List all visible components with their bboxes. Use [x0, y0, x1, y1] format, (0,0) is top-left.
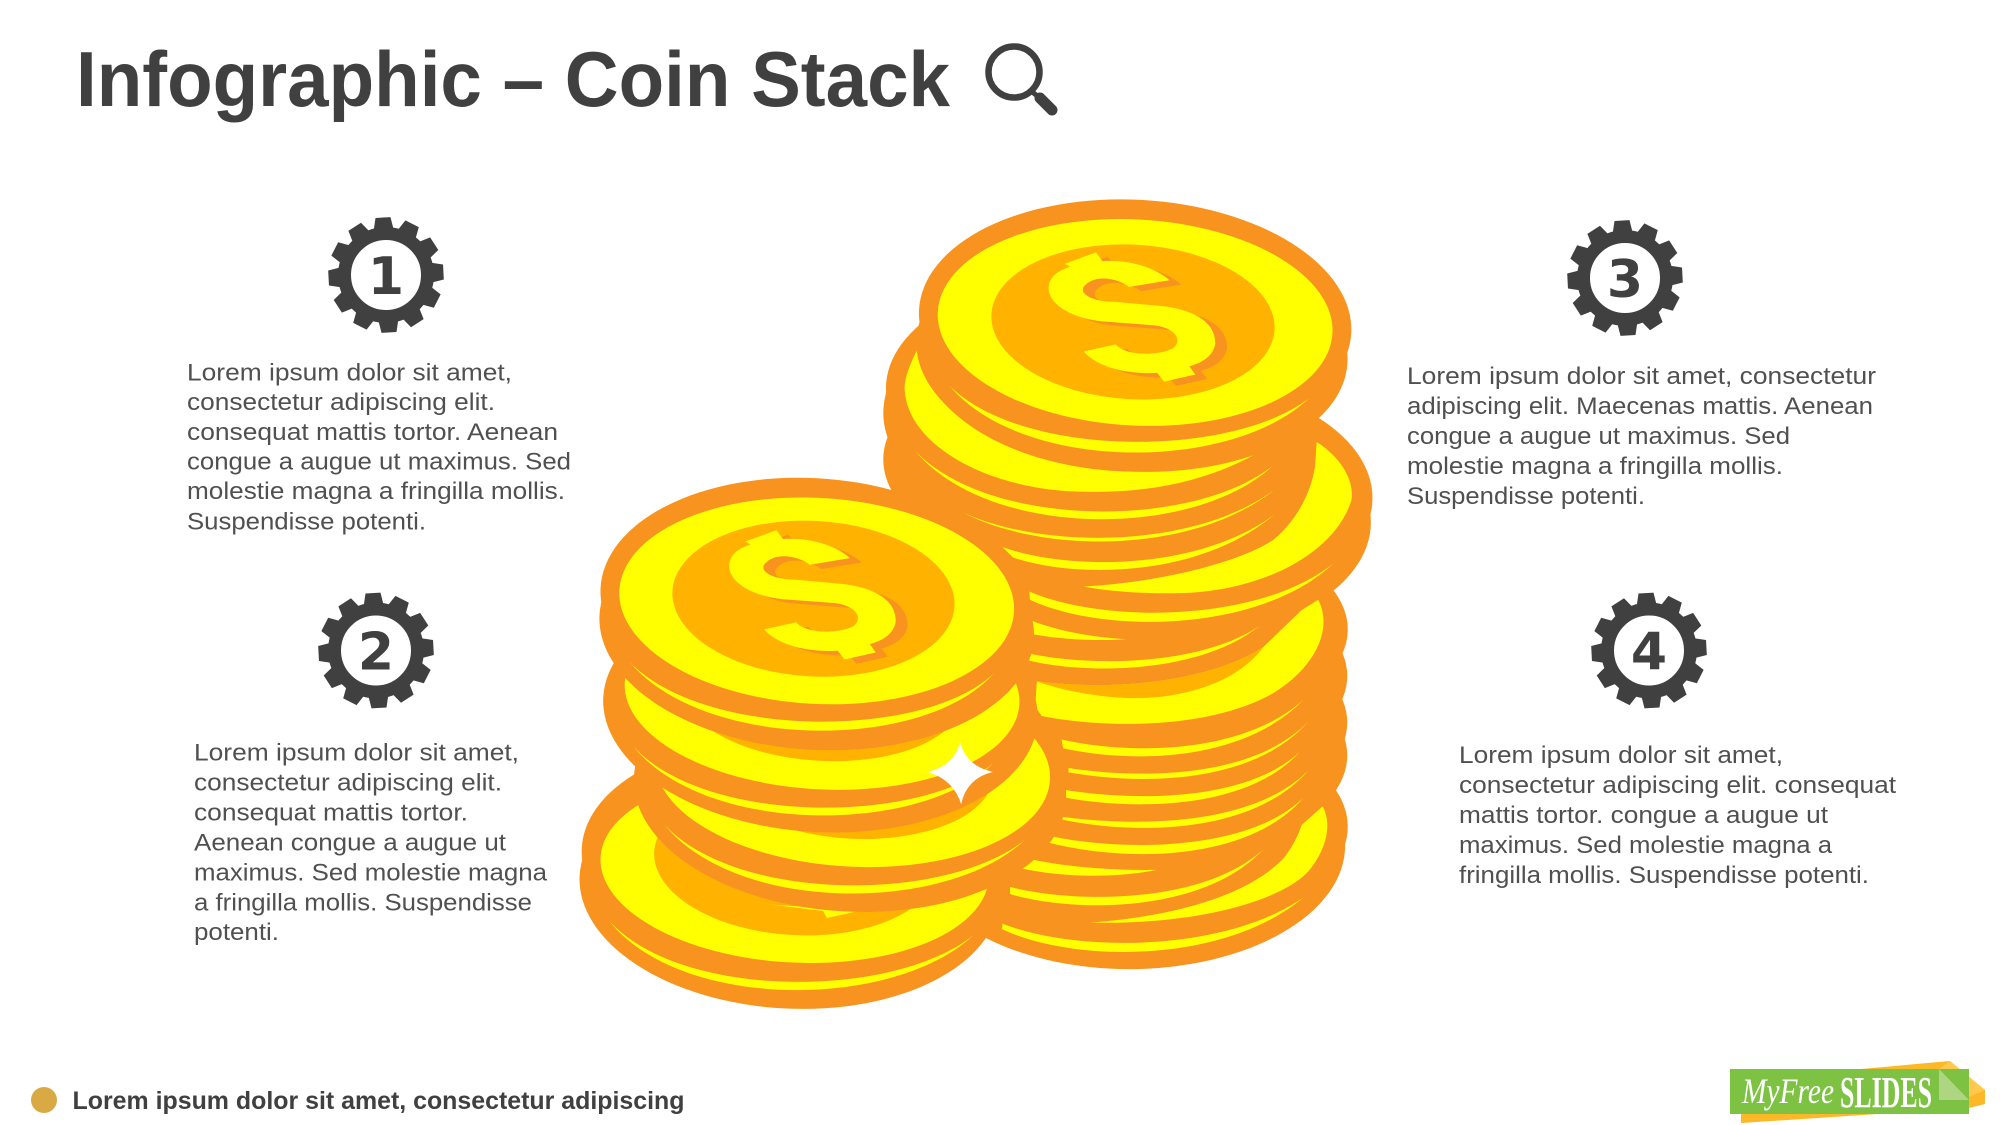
- text block 2: maximus. Sed molestie magna: [194, 860, 548, 886]
- text block 3: congue a augue ut maximus. Sed: [1407, 423, 1790, 450]
- text block 1: consectetur adipiscing elit.: [187, 389, 495, 416]
- left stack: third coin: [597, 574, 1044, 844]
- icon: gear 1: [328, 217, 444, 333]
- text block 1: molestie magna a fringilla mollis.: [187, 478, 565, 505]
- text block 2: [194, 740, 548, 946]
- right coin stack: [883, 270, 1372, 969]
- text block 4: consectetur adipiscing elit. consequat: [1459, 772, 1896, 799]
- title: Infographic – Coin Stack: [76, 35, 951, 123]
- text block 3: Suspendisse potenti.: [1407, 483, 1645, 510]
- text block 2: a fringilla mollis. Suspendisse: [194, 890, 532, 916]
- text block 3: Lorem ipsum dolor sit amet, consectetur: [1407, 363, 1876, 390]
- left stack: top coin: [593, 467, 1040, 761]
- text block 4: Lorem ipsum dolor sit amet,: [1459, 742, 1783, 769]
- text block 2: Aenean congue a augue ut: [194, 830, 506, 856]
- text block 1: congue a augue ut maximus. Sed: [187, 448, 571, 476]
- text block 1: Lorem ipsum dolor sit amet,: [187, 360, 512, 386]
- icon: gear 3: 3: [1607, 250, 1643, 310]
- footer text: Lorem ipsum dolor sit amet, consectetur adipiscing: [72, 1087, 684, 1115]
- text block 4: maximus. Sed molestie magna a: [1459, 832, 1833, 859]
- text block 3: adipiscing elit. Maecenas mattis. Aenean: [1407, 393, 1873, 420]
- text block 4: [1459, 742, 1896, 889]
- left stack: bottom coin: [573, 728, 1017, 1020]
- left stack: second coin: [628, 654, 1072, 923]
- text block 2: potenti.: [194, 919, 279, 946]
- text block 1: [187, 360, 571, 536]
- icon: gear 2: [318, 593, 434, 708]
- logo: MyFree: [1741, 1071, 1834, 1111]
- text block 4: fringilla mollis. Suspendisse potenti.: [1459, 862, 1869, 889]
- top coin, right stack: [910, 188, 1357, 483]
- text block 1: consequat mattis tortor. Aenean: [187, 419, 558, 446]
- icon: gear 4: [1591, 593, 1707, 708]
- icon: gear 2: 2: [358, 622, 394, 682]
- sparkle: [927, 742, 993, 804]
- footer bullet: [31, 1087, 57, 1113]
- text block 1: Suspendisse potenti.: [187, 508, 426, 536]
- logo: SLIDES: [1840, 1068, 1932, 1117]
- text block 3: [1407, 363, 1876, 510]
- icon: gear 1: 1: [368, 247, 404, 307]
- icon: magnifying glass: [988, 46, 1052, 110]
- text block 3: molestie magna a fringilla mollis.: [1407, 453, 1783, 480]
- illustration: coin stacks: [573, 188, 1372, 1020]
- text block 2: consequat mattis tortor.: [194, 800, 468, 826]
- text block 2: Lorem ipsum dolor sit amet,: [194, 740, 519, 766]
- icon: gear 4: 4: [1631, 622, 1667, 682]
- logo: [1730, 1061, 1985, 1123]
- text block 2: consectetur adipiscing elit.: [194, 770, 502, 796]
- text block 4: mattis tortor. congue a augue ut: [1459, 802, 1828, 829]
- icon: gear 3: [1567, 220, 1683, 336]
